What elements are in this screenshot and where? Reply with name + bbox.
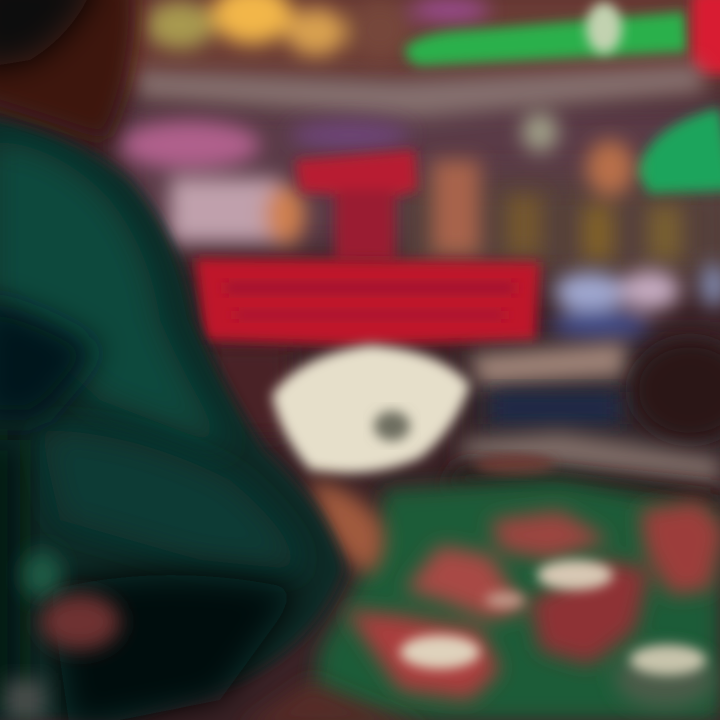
red sign corner [692, 0, 720, 74]
green felt [310, 480, 720, 720]
person: lower hand [40, 594, 120, 650]
person: dark green jacket [0, 115, 345, 720]
large red banner [195, 258, 540, 345]
table rail [460, 432, 720, 486]
red upper sign [295, 150, 418, 260]
foreground lower edge [5, 680, 430, 720]
pink and white upper left [120, 121, 410, 245]
ceiling lights [146, 0, 490, 60]
counter and dark stool [470, 340, 720, 440]
grey balcony band [135, 64, 705, 118]
casino chips [345, 500, 720, 708]
columns and slot screens [432, 112, 682, 260]
green round sign [636, 108, 720, 194]
blue and white machines [550, 263, 720, 341]
person: head [0, 0, 136, 140]
hand holding cards [310, 480, 384, 575]
white playing cards [272, 345, 470, 473]
green sign [405, 2, 688, 66]
